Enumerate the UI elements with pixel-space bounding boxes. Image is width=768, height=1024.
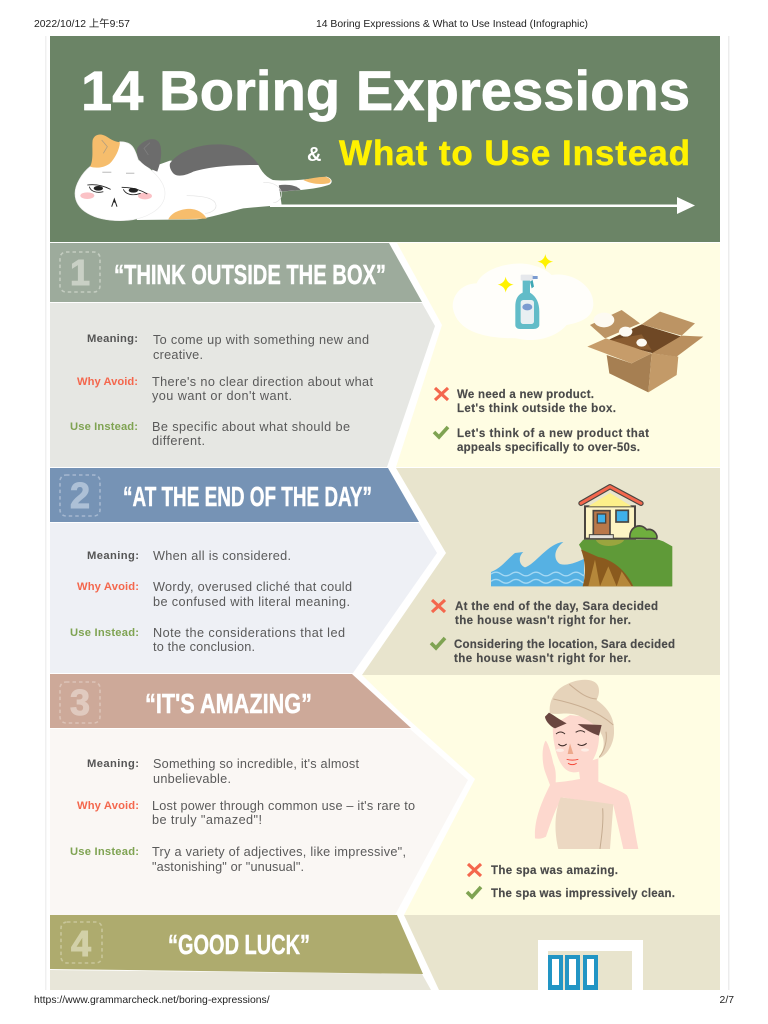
example sentences 1: Let's think outside the box. xyxy=(457,403,616,415)
definition text 3 xyxy=(70,757,415,874)
definition text 1: Use Instead: xyxy=(70,421,138,433)
icon: cross xyxy=(468,864,481,876)
browser print footer: 2/7 xyxy=(720,995,734,1006)
heading band 1: “THINK OUTSIDE THE BOX” xyxy=(114,259,386,290)
illustration: cloud and spray bottle xyxy=(453,254,593,340)
definition text 1: Why Avoid: xyxy=(77,376,138,388)
definition text 2: Note the considerations that led xyxy=(153,626,345,640)
definition text 3: Something so incredible, it's almost xyxy=(153,757,359,771)
panel: section 2 example background xyxy=(362,468,720,675)
heading band 4 xyxy=(50,915,423,974)
heading band 3 xyxy=(50,674,411,728)
heading band 2: “AT THE END OF THE DAY” xyxy=(123,481,372,512)
definition text 2 xyxy=(70,549,352,654)
illustration: house on cliff xyxy=(491,487,672,586)
example sentences 2: At the end of the day, Sara decided xyxy=(455,601,658,613)
definition text 1: different. xyxy=(152,434,205,448)
example sentences 2: Considering the location, Sara decided xyxy=(454,639,675,651)
illustration: woman in towel xyxy=(535,680,638,849)
panel: section 3 xyxy=(50,674,468,915)
panel: section 1 example background xyxy=(396,243,720,467)
example sentences 3: The spa was impressively clean. xyxy=(491,888,675,900)
heading band 3: 3 xyxy=(70,682,90,723)
heading band 1: 1 xyxy=(70,252,90,293)
panel: section 2 xyxy=(50,468,437,673)
browser print footer: https://www.grammarcheck.net/boring-expressions/ xyxy=(34,995,270,1006)
definition text 2: Why Avoid: xyxy=(77,581,139,593)
illustration: window with blue binders xyxy=(538,940,643,990)
definition text 1 xyxy=(70,333,373,448)
icon: cross xyxy=(432,600,445,612)
example sentences 1: We need a new product. xyxy=(457,389,594,401)
heading band 2: 2 xyxy=(70,475,90,516)
heading band 4: 4 xyxy=(71,923,91,964)
definition text 2: to the conclusion. xyxy=(153,640,255,654)
definition text 3: Try a variety of adjectives, like impressive", xyxy=(152,845,406,859)
example sentences 1 xyxy=(434,388,649,454)
heading band 4: “GOOD LUCK” xyxy=(168,929,310,960)
definition text 1: Be specific about what should be xyxy=(152,420,350,434)
definition text 3: Lost power through common use – it's rare to xyxy=(152,799,415,813)
definition text 1: creative. xyxy=(153,348,203,362)
definition text 1: There's no clear direction about what xyxy=(152,375,373,389)
panel: section 4 example background xyxy=(404,915,720,990)
definition text 3: be truly "amazed"! xyxy=(152,813,262,827)
definition text 2: Use Instead: xyxy=(70,627,139,639)
example sentences 2: the house wasn't right for her. xyxy=(454,653,631,665)
browser print header xyxy=(34,17,588,30)
definition text 1: you want or don't want. xyxy=(152,389,292,403)
definition text 3: Use Instead: xyxy=(70,846,139,858)
example sentences 1: appeals specifically to over-50s. xyxy=(457,442,640,454)
title: 14 Boring Expressions xyxy=(81,59,690,122)
icon: cross xyxy=(435,388,448,400)
title banner xyxy=(50,36,720,242)
icon: check xyxy=(434,427,448,437)
arrow xyxy=(270,197,695,214)
panel: section 3 example background xyxy=(362,675,720,915)
subtitle: & xyxy=(307,144,321,166)
definition text 1: To come up with something new and xyxy=(153,333,369,347)
icon: check xyxy=(431,638,445,648)
definition text 1: Meaning: xyxy=(87,333,138,345)
definition text 3: Meaning: xyxy=(87,758,139,770)
heading band 1 xyxy=(50,243,422,302)
example sentences 1: Let's think of a new product that xyxy=(457,428,649,440)
panel: section 4 xyxy=(50,915,431,990)
example sentences 2: the house wasn't right for her. xyxy=(455,615,631,627)
icon: lazy cat xyxy=(75,134,332,221)
panel: section 1 xyxy=(50,243,435,467)
heading band 2 xyxy=(50,468,419,522)
definition text 3: unbelievable. xyxy=(153,772,231,786)
illustration: cardboard box xyxy=(587,310,703,392)
subtitle: What to Use Instead xyxy=(339,134,690,173)
definition text 2: When all is considered. xyxy=(153,549,291,563)
definition text 2: Meaning: xyxy=(87,550,139,562)
definition text 2: Wordy, overused cliché that could xyxy=(153,580,352,594)
heading band 3: “IT'S AMAZING” xyxy=(145,688,312,719)
browser print header: 2022/10/12 上午9:57 xyxy=(34,17,130,30)
definition text 2: be confused with literal meaning. xyxy=(153,595,350,609)
example sentences 3: The spa was amazing. xyxy=(491,865,618,877)
definition text 3: "astonishing" or "unusual". xyxy=(152,860,304,874)
example sentences 3 xyxy=(467,864,675,900)
definition text 3: Why Avoid: xyxy=(77,800,139,812)
browser print footer xyxy=(34,995,734,1006)
browser print header: 14 Boring Expressions & What to Use Instead (Infographic) xyxy=(316,19,588,30)
example sentences 2 xyxy=(431,600,675,665)
icon: check xyxy=(467,887,481,897)
